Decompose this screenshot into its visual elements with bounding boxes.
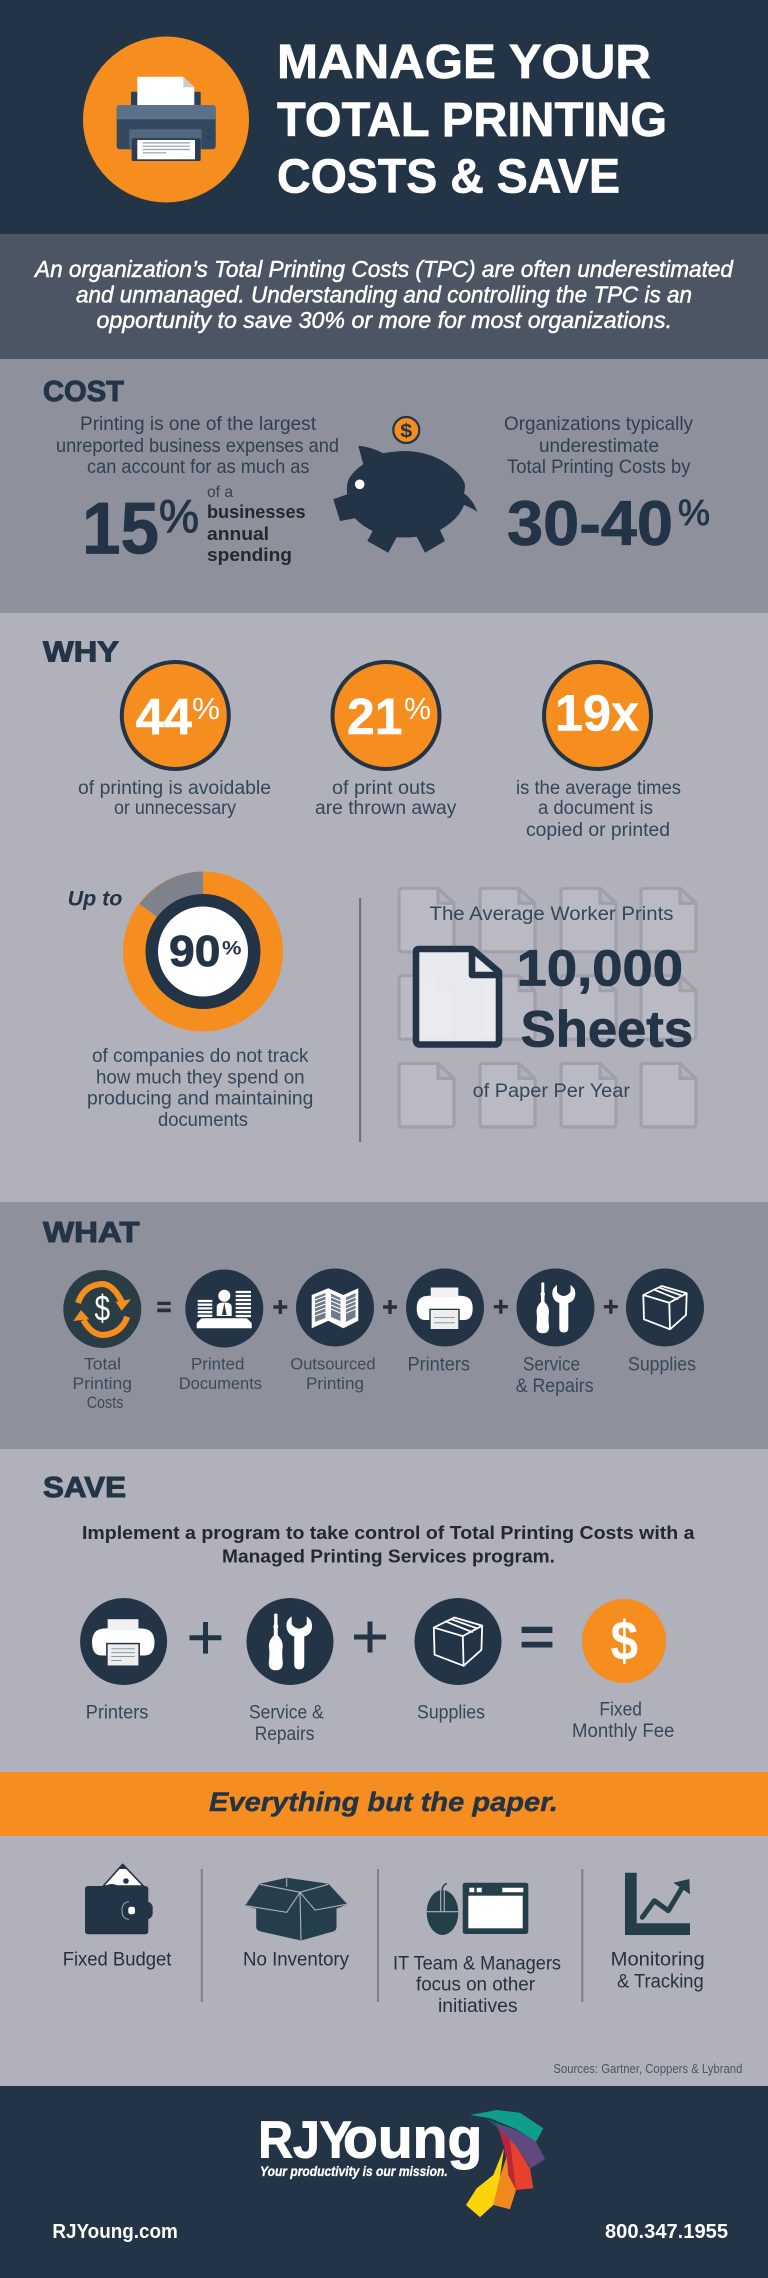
stat: 10,000 sheets [430, 904, 693, 1102]
text: avoidable: or unnecessary [114, 798, 236, 819]
operator: plus [273, 1300, 287, 1314]
logo: RJYoung: oung [343, 2106, 482, 2170]
stat: 30-40 percent: 30-40 [507, 489, 673, 559]
sources note: Sources: Gartner, Coppers & Lybrand [553, 2061, 742, 2076]
text: printing unreported expense: can account for as much as [87, 456, 310, 478]
stat: 10,000 sheets: of Paper Per Year [473, 1081, 631, 1102]
intro text: and unmanaged. Understanding and controlling the TPC is an [76, 282, 692, 308]
stat circle: 19x: 19x [555, 684, 639, 742]
section background: footer [0, 2086, 768, 2278]
text: avoidable: of printing is avoidable [78, 778, 271, 799]
section background: benefits [0, 1836, 768, 2086]
label: no inventory: No Inventory [243, 1950, 349, 1970]
stat: 30-40 percent: % [678, 492, 710, 533]
text: times copied: a document is [538, 798, 653, 819]
text: printing unreported expense: unreported business expenses and [56, 435, 339, 457]
section background: save [0, 1449, 768, 1772]
text: times copied [516, 778, 681, 841]
operator: plus [354, 1622, 386, 1652]
text: underestimate: Total Printing Costs by [507, 456, 691, 478]
text: companies do not track: how much they spend on [96, 1067, 305, 1088]
labels: fixed monthly fee: Monthly Fee [572, 1721, 674, 1742]
stat circle: 21 percent [332, 662, 440, 769]
donut chart: 90 percent: % [222, 938, 242, 960]
logo: RJYoung: Your productivity is our mission. [260, 2164, 448, 2179]
section background: header [0, 0, 768, 234]
labels: monitoring and tracking [611, 1950, 705, 1992]
operator: plus [494, 1300, 508, 1314]
labels: service and repairs: & Repairs [516, 1376, 594, 1397]
label: printers: Printers [408, 1355, 470, 1376]
stat circle: 21 percent: 21 [347, 688, 402, 745]
text: thrown away: of print outs [332, 778, 435, 799]
labels: printed documents [179, 1355, 262, 1393]
heading: what: WHAT [43, 1217, 140, 1249]
stat: 15 percent: businesses [207, 501, 306, 522]
labels: outsourced printing [290, 1355, 376, 1393]
labels: printed documents: Printed [191, 1355, 244, 1374]
label: supplies: Supplies [628, 1355, 696, 1376]
labels: it team and managers: focus on other [416, 1975, 536, 1996]
labels: it team and managers: initiatives [438, 1996, 518, 2017]
labels: service and repairs [249, 1703, 324, 1745]
operator: plus [383, 1300, 397, 1314]
text: underestimate: Organizations typically [504, 413, 693, 435]
text: times copied: copied or printed [526, 820, 670, 841]
background pattern: ghost paper sheets [399, 888, 696, 1127]
text: implement a program [82, 1522, 695, 1566]
operator: plus [190, 1622, 221, 1654]
intro text: An organization’s Total Printing Costs (TPC) are often underestimated [33, 256, 734, 282]
stat: 15 percent: annual [207, 523, 269, 544]
stat: 10,000 sheets: Sheets [521, 1001, 693, 1058]
labels: service and repairs: Repairs [255, 1724, 314, 1745]
text: printing unreported expense: Printing is one of the largest [80, 413, 317, 435]
icon: printer in orange circle [83, 36, 249, 202]
icon: supplies box [626, 1268, 704, 1346]
logo: RJYoung [258, 2106, 545, 2217]
icon: growth chart [625, 1873, 690, 1935]
title [277, 36, 667, 204]
section background: what [0, 1202, 768, 1449]
text: implement a program: Implement a program to take control of Total Printing Costs with a [82, 1522, 695, 1543]
icon: mouse and browser window [427, 1883, 528, 1935]
labels: total printing costs [72, 1355, 132, 1412]
section background: cost [0, 359, 768, 613]
stat: 15 percent: % [159, 490, 199, 542]
labels: monitoring and tracking: Monitoring [611, 1950, 705, 1970]
text: underestimate [504, 413, 693, 478]
icon: outsourced printing brochure [296, 1268, 374, 1346]
icon: large paper sheet [416, 949, 499, 1044]
stat: 15 percent: spending [207, 544, 292, 565]
icon: service and repairs tools [246, 1598, 334, 1685]
operator: equals [522, 1627, 552, 1648]
stat circle: 44 percent: 44 [136, 688, 193, 745]
labels: service and repairs [516, 1355, 594, 1397]
heading: save: SAVE [43, 1472, 126, 1504]
labels: printed documents: Documents [179, 1374, 262, 1393]
labels: total printing costs: Printing [72, 1374, 132, 1393]
text: thrown away: are thrown away [315, 798, 457, 819]
icon: fixed monthly fee dollar [582, 1599, 666, 1683]
icon: piggy bank with coin [333, 417, 477, 553]
label: supplies: Supplies [417, 1703, 485, 1724]
icon: printers [80, 1598, 167, 1685]
footer: website: RJYoung.com [52, 2221, 178, 2243]
label: fixed budget: Fixed Budget [63, 1950, 172, 1970]
operator: equals [157, 1302, 171, 1312]
stat: 10,000 sheets: 10,000 [517, 940, 683, 996]
text: implement a program: Managed Printing Services program. [222, 1546, 555, 1566]
text: printing unreported expense [56, 413, 339, 478]
text: underestimate: underestimate [539, 435, 659, 457]
stat circle: 21 percent: % [404, 691, 431, 726]
footer: phone: 800.347.1955 [605, 2221, 728, 2243]
title: TOTAL PRINTING [277, 94, 667, 147]
icon: fixed monthly fee dollar: $ [610, 1609, 638, 1672]
donut chart: 90 percent [123, 872, 283, 1032]
stat: 10,000 sheets: The Average Worker Prints [430, 904, 674, 925]
text: avoidable [78, 778, 271, 819]
text: companies do not track: producing and maintaining [87, 1088, 313, 1109]
icon: wallet [85, 1864, 153, 1934]
heading: why: WHY [43, 636, 119, 668]
stat circle: 44 percent [122, 662, 229, 769]
label: up to: Up to [68, 887, 123, 910]
icon: total printing costs: $ [94, 1288, 110, 1329]
text: companies do not track: documents [158, 1110, 248, 1131]
text: times copied: is the average times [516, 778, 681, 799]
title: COSTS & SAVE [277, 150, 620, 204]
labels: fixed monthly fee [572, 1699, 674, 1742]
labels: it team and managers: IT Team & Managers [393, 1954, 561, 1974]
icon: supplies box [414, 1598, 502, 1685]
banner: everything but the paper [0, 1772, 768, 1836]
icon: printers [406, 1268, 484, 1346]
text: thrown away [315, 778, 457, 819]
section background: intro [0, 234, 768, 359]
labels: monitoring and tracking: & Tracking [617, 1971, 704, 1992]
icon: service and repairs tools [516, 1268, 594, 1346]
labels: outsourced printing: Outsourced [290, 1355, 376, 1374]
label: printers: Printers [86, 1703, 148, 1724]
logo: RJYoung: RJY [258, 2112, 352, 2170]
icon: open box [246, 1878, 347, 1940]
text: companies do not track: of companies do not track [92, 1046, 309, 1067]
stat circle: 44 percent: % [192, 691, 220, 726]
icon: piggy bank with coin: $ [400, 421, 413, 442]
stat: 15 percent: 15 [82, 488, 159, 570]
labels: it team and managers [393, 1954, 561, 2017]
labels: fixed monthly fee: Fixed [599, 1699, 642, 1720]
labels: outsourced printing: Printing [306, 1374, 364, 1393]
title: MANAGE YOUR [277, 36, 651, 89]
icon: total printing costs [63, 1270, 141, 1348]
stat circle: 19x [544, 662, 651, 769]
donut chart: 90 percent: 90 [169, 927, 220, 976]
labels: total printing costs: Costs [87, 1393, 123, 1412]
labels: service and repairs: Service [523, 1355, 580, 1376]
intro text [33, 256, 734, 333]
labels: total printing costs: Total [84, 1355, 121, 1374]
icon: printed documents [185, 1270, 263, 1348]
heading: cost: COST [43, 376, 124, 408]
stat: 15 percent: of a [207, 484, 233, 501]
intro text: opportunity to save 30% or more for most organizations. [96, 307, 672, 333]
text: companies do not track [87, 1046, 313, 1131]
section background: why [0, 613, 768, 1202]
operator: plus [604, 1300, 618, 1314]
banner: everything but the paper: Everything but the paper. [209, 1787, 558, 1817]
stat: 15 percent [82, 484, 306, 570]
labels: service and repairs: Service & [249, 1703, 324, 1724]
